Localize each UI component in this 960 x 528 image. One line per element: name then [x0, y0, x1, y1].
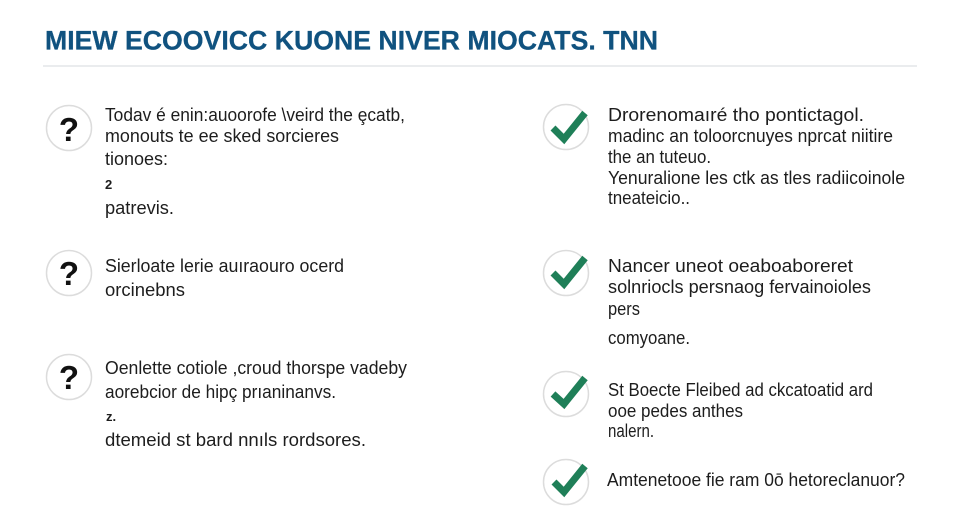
icon: question mark [46, 250, 92, 296]
answer 2 text: Nancer uneot oeaboaboreret [608, 256, 853, 276]
answer 1 text: tneateicio.. [608, 188, 690, 208]
question 1 text: Todav é enin:auoorofe \veird the ȩcatb, [105, 105, 405, 125]
answer 2 text [608, 256, 871, 348]
left column: questions [46, 105, 407, 450]
answer item 2 [544, 250, 871, 348]
question 3 text [105, 358, 407, 450]
icon: question mark: ? [59, 255, 79, 292]
question 2 text: orcinebns [105, 280, 185, 300]
question item 1 [46, 105, 405, 218]
answer 3 text: St Boecte Fleibed ad ckcatoatid ard [608, 380, 873, 400]
question 1 text [105, 105, 405, 218]
answer 3 text: ooe pedes anthes [608, 401, 743, 421]
question 3 text: z. [106, 409, 116, 424]
title: MIEW ECOOVICC KUONE NIVER MIOCATS. TNN [45, 26, 658, 56]
icon: question mark [46, 106, 92, 150]
icon: check mark [544, 250, 588, 296]
icon: check mark [544, 372, 588, 416]
answer 2 text: solnriocls persnaog fervainoioles [608, 277, 871, 297]
icon: question mark: ? [59, 359, 79, 396]
question 2 text: Sierloate lerie auıraouro ocerd [105, 256, 344, 276]
question 2 text [105, 256, 344, 300]
question 1 text: 2 [105, 177, 112, 192]
answer 1 text: Yenuralione les ctk as tles radiicoinole [608, 168, 905, 188]
icon: check mark [544, 104, 588, 150]
question 1 text: monouts te ee sked sorcieres [105, 126, 339, 146]
answer 1 text: the an tuteuo. [608, 147, 711, 167]
question item 3 [46, 354, 407, 450]
question 1 text: tionoes: [105, 149, 168, 169]
answer 4 text: Amtenetooe fie ram 0ō hetoreclanuor? [607, 470, 905, 490]
answer item 3 [544, 372, 873, 441]
answer 1 text: Drorenomaıré tho pontictagol. [608, 105, 864, 125]
answer 3 text: nalern. [608, 421, 654, 441]
question 3 text: aorebcior de hipç prıaninanvs. [105, 382, 336, 402]
answer 1 text [608, 105, 905, 208]
icon: check mark [544, 460, 588, 504]
icon: question mark [46, 354, 92, 400]
question 3 text: Oenlette cotiole ,croud thorspe vadeby [105, 358, 407, 378]
answer item 1 [544, 104, 905, 208]
icon: question mark: ? [59, 111, 79, 148]
question item 2 [46, 250, 344, 300]
answer 3 text [608, 380, 873, 441]
question 3 text: dtemeid st bard nnıls rordsores. [105, 430, 366, 450]
answer 2 text: pers [608, 299, 640, 319]
answer 1 text: madinc an toloorcnuyes nprcat niitire [608, 126, 893, 146]
answer 2 text: comyoane. [608, 328, 690, 348]
question 1 text: patrevis. [105, 198, 174, 218]
right column: answers [544, 104, 905, 504]
answer item 4 [544, 460, 905, 504]
